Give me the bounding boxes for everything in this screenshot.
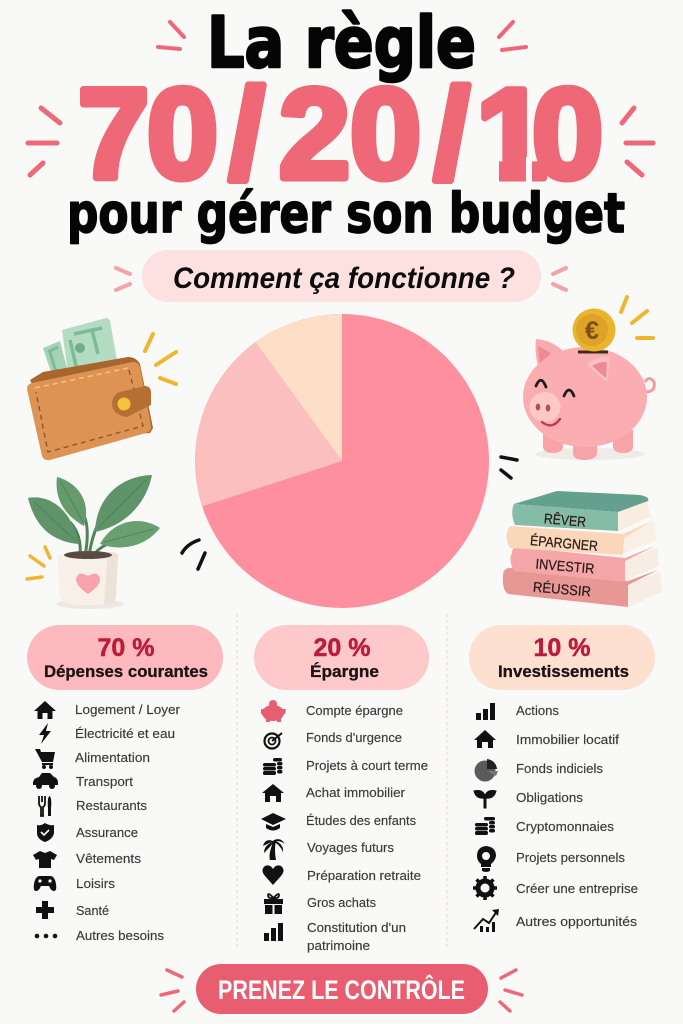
coin sparkle [621,297,653,338]
book: investir: INVESTIR [535,555,595,577]
question pill rays [116,268,566,290]
title rays [28,22,653,175]
item: obligations [474,790,584,808]
item: autres opportunités [474,909,638,932]
header pill: épargne: Épargne [310,662,379,681]
item: cryptomonnaies: Cryptomonnaies [516,819,615,834]
item: préparation retraite [262,865,421,885]
item: cryptomonnaies [475,817,615,835]
item: gros achats: Gros achats [307,895,376,910]
icon: plant in pot [28,475,160,609]
wallet sparkle [145,334,176,384]
icon: euro coin [572,308,616,352]
item: projets court terme [263,758,428,775]
plant sparkle [27,547,50,579]
call to action button [196,964,488,1014]
item: vêtements [33,851,142,868]
panel: 10 percent [469,625,655,932]
item: constitution patrimoine [264,920,406,953]
title line one: La règle [207,2,476,84]
item: assurance [37,823,138,842]
book: réussir [503,568,662,607]
item: autres opportunités: Autres opportunités [516,914,638,929]
header pill: investissements: Investissements [498,662,629,681]
item: constitution patrimoine: patrimoine [307,938,370,953]
book: épargner [506,520,656,555]
item: vêtements: Vêtements [76,851,142,866]
item: autres besoins [35,928,165,943]
item: voyages: Voyages futurs [307,840,395,855]
header pill: dépenses courantes: 70 % [98,634,154,662]
header pill: investissements [469,625,655,690]
item: gros achats [264,894,376,914]
item: constitution patrimoine: Constitution d'un [307,920,406,935]
item: logement [34,701,181,719]
icon: book stack [503,491,662,607]
pie accent strokes [182,457,517,569]
item: fonds d'urgence: Fonds d'urgence [306,730,402,745]
question pill: Comment ça fonctionne ? [173,262,515,295]
button rays [161,970,522,1011]
item: créer une entreprise: Créer une entreprise [516,881,638,896]
header pill: dépenses courantes [27,625,223,690]
item: fonds indiciels: Fonds indiciels [516,761,603,776]
icon: euro coin: € [585,317,599,345]
item: transport: Transport [76,774,133,789]
item: actions: Actions [516,703,559,718]
item: études: Études des enfants [306,813,416,828]
item: fonds indiciels [474,759,603,782]
book: investir [510,546,659,582]
item: créer une entreprise [473,876,638,900]
book: réussir: RÉUSSIR [532,579,592,599]
book: épargner: ÉPARGNER [529,532,599,554]
item: transport [33,773,133,789]
item: santé [36,901,109,919]
item: autres besoins: Autres besoins [76,928,165,943]
item: préparation retraite: Préparation retraite [307,868,421,883]
item: études [261,813,416,830]
call to action button: PRENEZ LE CONTRÔLE [218,974,465,1005]
item: santé: Santé [76,903,109,918]
header pill: épargne [254,625,429,690]
pie chart [195,314,489,608]
item: électricité [39,723,175,744]
item: loisirs [34,876,116,891]
panel: 70 percent [27,625,223,943]
item: projets personnels [477,846,626,872]
item: assurance: Assurance [76,825,138,840]
book: rêver [512,491,650,531]
item: immobilier locatif [474,730,619,748]
item: compte épargne: Compte épargne [306,703,403,718]
item: logement: Logement / Loyer [75,702,181,717]
icon: piggy bank [523,339,654,460]
item: obligations: Obligations [516,790,584,805]
leaves [28,475,160,547]
header pill: investissements: 10 % [534,634,590,662]
item: restaurants: Restaurants [76,798,148,813]
item: restaurants [39,796,148,816]
item: actions [476,703,559,720]
book: rêver: RÊVER [543,510,587,530]
item: projets personnels: Projets personnels [516,850,626,865]
item: alimentation: Alimentation [75,750,150,765]
item: fonds d'urgence [264,730,402,748]
header pill: dépenses courantes: Dépenses courantes [44,662,208,681]
column dividers [237,614,447,950]
item: achat immobilier: Achat immobilier [306,785,406,800]
item: immobilier locatif: Immobilier locatif [516,732,619,747]
item: achat immobilier [262,784,406,802]
question pill [142,250,541,302]
item: projets court terme: Projets à court terme [306,758,428,773]
icon: wallet [27,318,153,460]
item: alimentation [35,749,150,769]
item: loisirs: Loisirs [76,876,116,891]
item: électricité: Électricité et eau [75,726,175,741]
item: compte épargne [261,700,403,722]
main number heading: 70/20/10 [78,63,603,206]
header pill: épargne: 20 % [314,634,370,662]
panel: 20 percent [254,625,429,953]
item: voyages [263,839,395,860]
